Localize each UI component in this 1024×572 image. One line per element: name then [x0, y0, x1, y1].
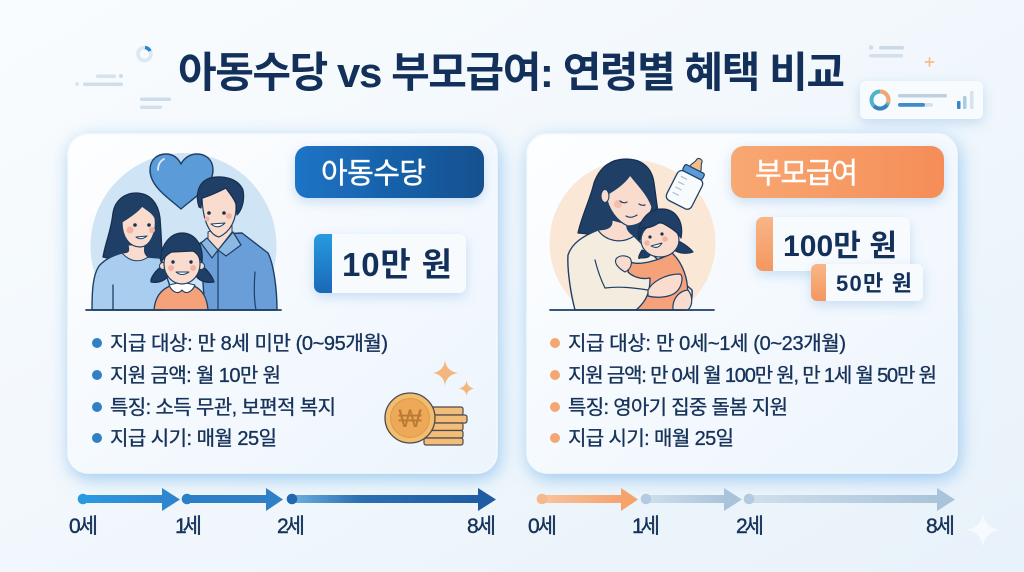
decoration: top left marks: [75, 48, 171, 109]
amount card: 100만 원: [756, 217, 910, 271]
baby body: [628, 253, 688, 310]
timeline: 부모급여 0세 to 8세: 1세: [632, 515, 660, 538]
label pill: 부모급여: 부모급여: [755, 158, 858, 190]
benefit list: 아동수당: 특징: 소득 무관, 보편적 복지: [110, 396, 336, 419]
label pill: 아동수당: [295, 146, 484, 198]
icon: won coins with sparkles: [385, 360, 474, 445]
amount card: 50만 원: [811, 264, 923, 301]
timeline: 부모급여 0세 to 8세: 0세: [528, 515, 557, 538]
amount card: 10만 원: [314, 234, 466, 293]
mother: [578, 159, 660, 240]
benefit list: 부모급여: 지원 금액: 만 0세 월 100만 원, 만 1세 월 50만 원: [568, 364, 937, 387]
woman: [103, 193, 162, 262]
timeline: 아동수당 0세 to 8세: 0세: [69, 515, 98, 538]
benefit list: 부모급여: 지급 시기: 매월 25일: [568, 427, 734, 450]
amount card: 100만 원: 100만 원: [783, 230, 897, 263]
timeline: 부모급여 0세 to 8세: [528, 488, 955, 538]
icon: blue heart: [150, 154, 213, 209]
mother's hands: [648, 274, 682, 297]
amount card: 50만 원: 50만 원: [836, 271, 912, 296]
timeline: 부모급여 0세 to 8세: 2세: [736, 515, 764, 538]
benefit list: 부모급여: 지급 대상: 만 0세~1세 (0~23개월): [568, 332, 846, 355]
timeline: 아동수당 0세 to 8세: [69, 488, 496, 538]
benefit list: 아동수당: 지급 대상: 만 8세 미만 (0~95개월): [110, 332, 388, 355]
illustration: mother holding baby with bottle: [549, 158, 716, 311]
benefit list: 아동수당: 지급 시기: 매월 25일: [110, 427, 277, 450]
benefit list: 부모급여: 특징: 영아기 집중 돌봄 지원: [568, 396, 788, 419]
girl: [151, 266, 214, 282]
benefit list: 아동수당: [92, 332, 388, 450]
timeline: 부모급여 0세 to 8세: 8세: [926, 515, 955, 538]
baby head: [639, 240, 693, 259]
timeline: 아동수당 0세 to 8세: 8세: [467, 515, 496, 538]
title: 아동수당 vs 부모급여: 연령별 혜택 비교: [178, 49, 845, 96]
man: [200, 233, 277, 310]
panel: 아동수당: [68, 134, 497, 473]
timeline: 아동수당 0세 to 8세: 1세: [175, 515, 202, 538]
illustration: family with heart: [85, 153, 282, 311]
decoration: top right marks and mini dashboard card: [860, 45, 983, 119]
panel: 부모급여: [527, 134, 957, 473]
icon: won coins with sparkles: ₩: [398, 405, 422, 433]
decoration: bottom right sparkle: [966, 513, 1000, 547]
amount card: 10만 원: 10만 원: [342, 246, 452, 283]
benefit list: 아동수당: 지원 금액: 월 10만 원: [110, 364, 281, 387]
label pill: 부모급여: [731, 146, 944, 198]
icon: baby bottle: [665, 153, 713, 211]
benefit list: 부모급여: [550, 332, 937, 450]
timeline: 아동수당 0세 to 8세: 2세: [277, 515, 305, 538]
label pill: 아동수당: 아동수당: [321, 158, 426, 190]
